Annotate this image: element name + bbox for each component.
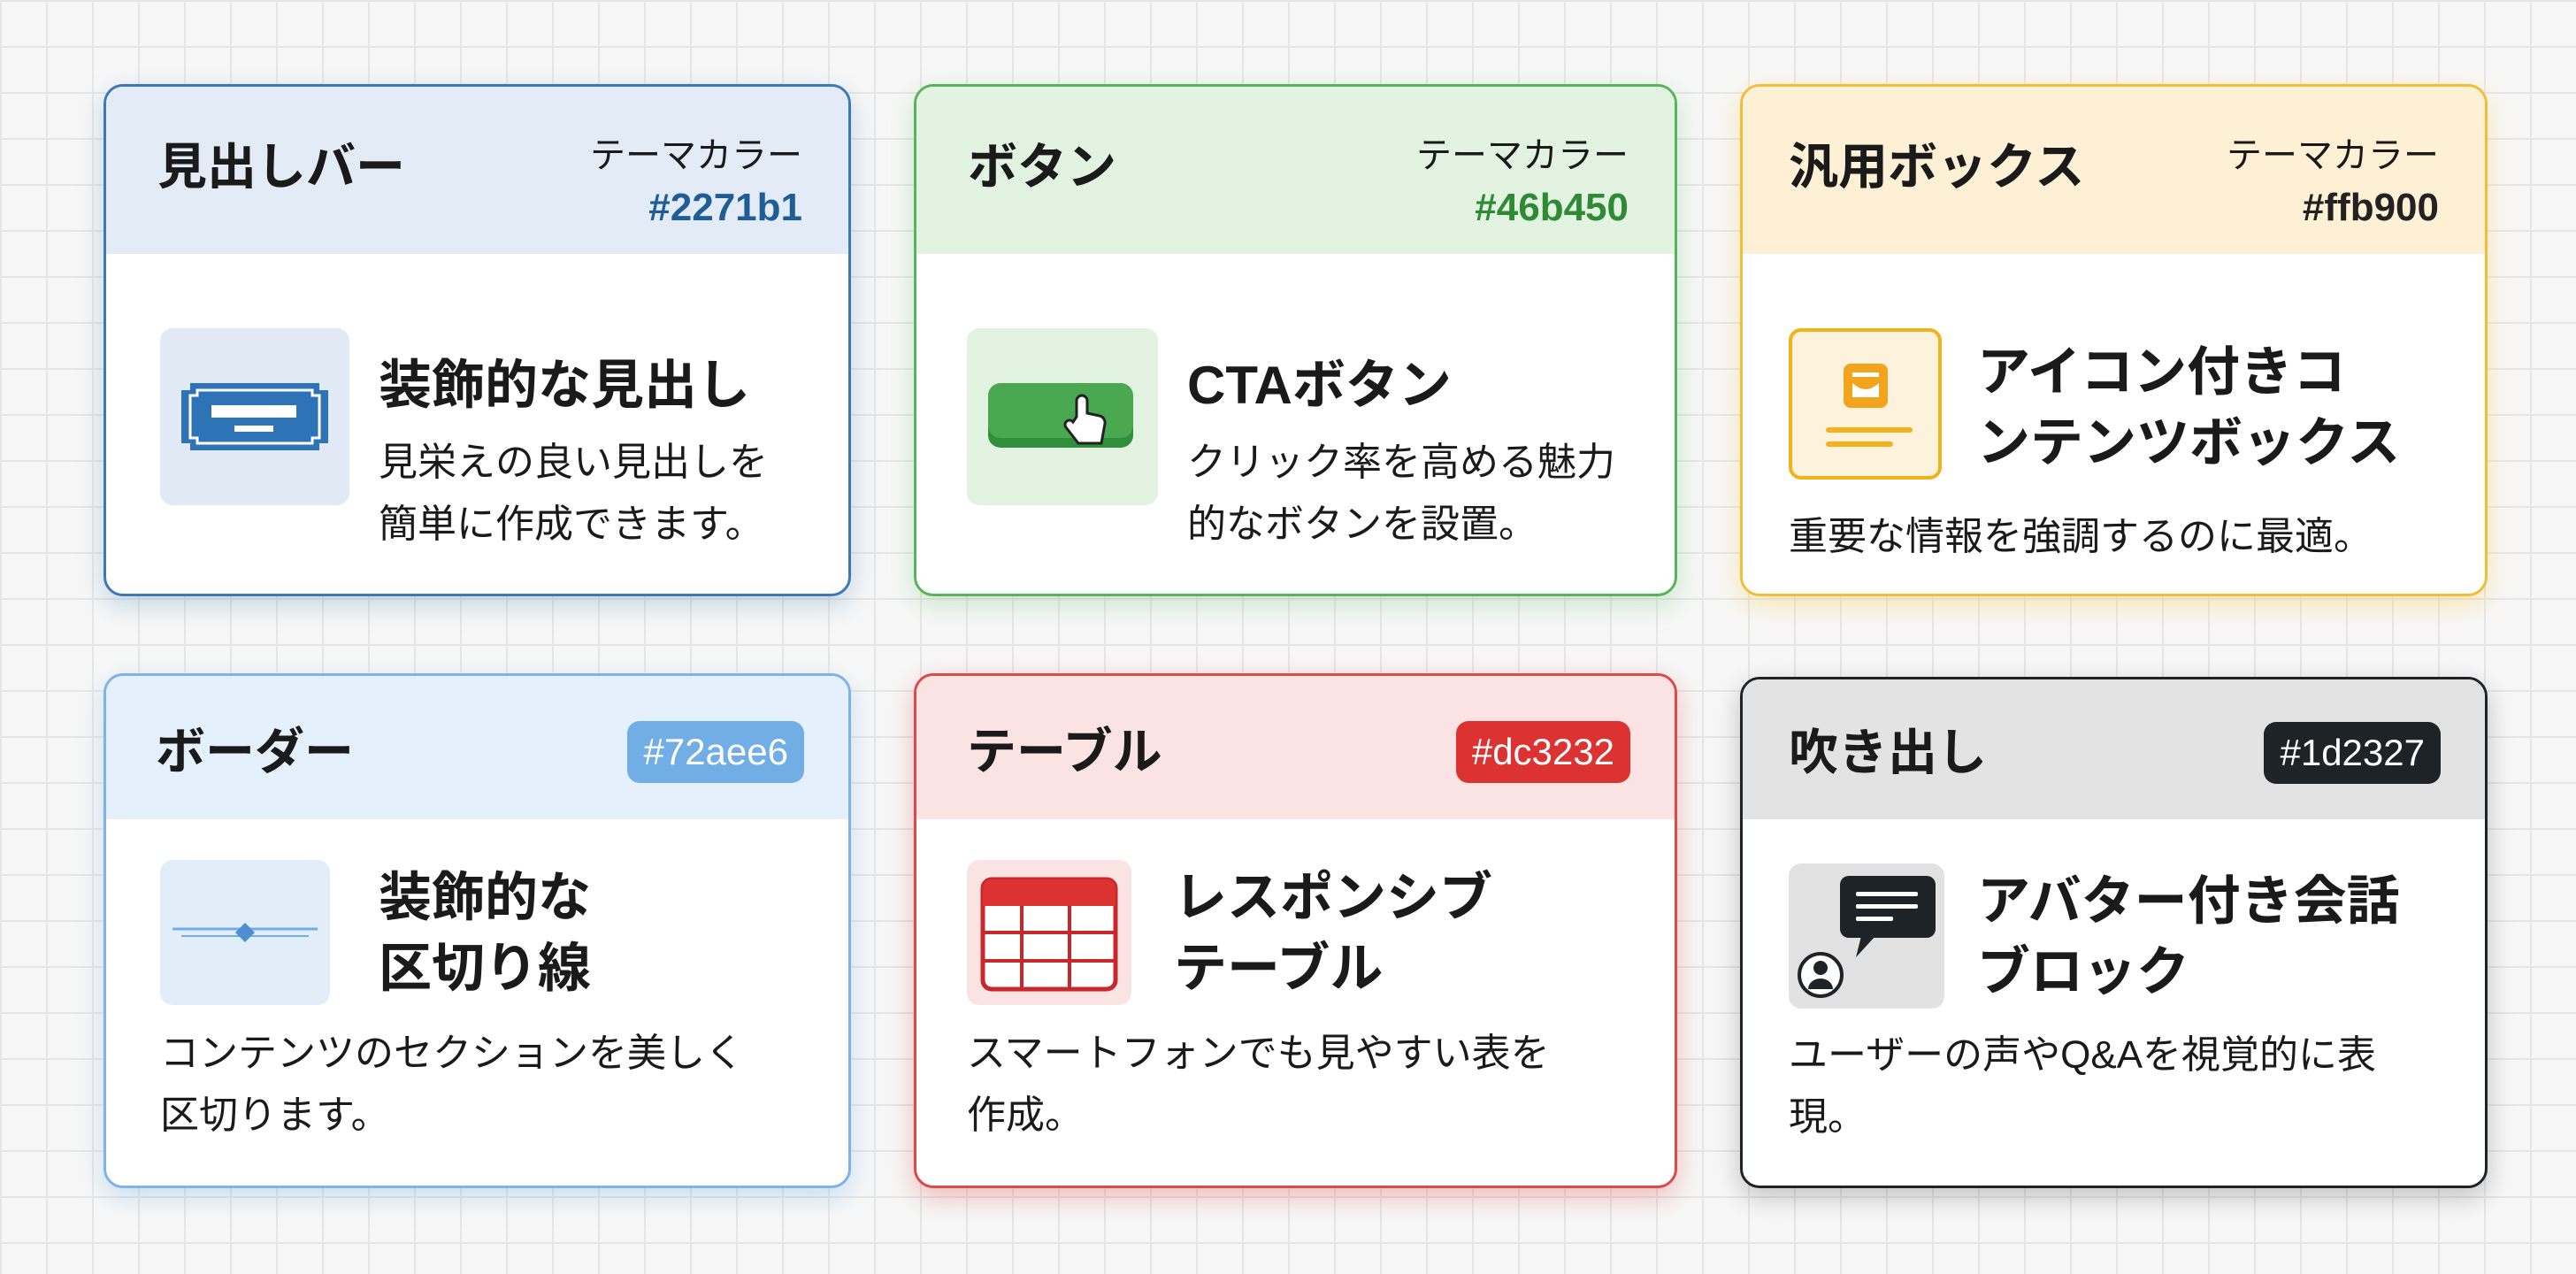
- icon: CTA button: [967, 328, 1158, 505]
- theme color label: テーマカラー: [2227, 136, 2439, 175]
- description: コンテンツのセクションを美しく: [160, 1032, 744, 1075]
- description: スマートフォンでも見やすい表を: [967, 1032, 1550, 1075]
- hex code: #46b450: [1475, 186, 1629, 229]
- title: レスポンシブテーブル: [1174, 868, 1492, 998]
- header: border: [106, 676, 848, 819]
- heading: 吹き出し: 吹き出し: [1789, 725, 1987, 780]
- panel: heading bar: [104, 84, 851, 596]
- header: table: [916, 676, 1675, 819]
- description: [967, 1032, 1550, 1137]
- description: [160, 1032, 744, 1137]
- hex code: #ffb900: [2303, 186, 2439, 229]
- theme color label: テーマカラー: [1416, 136, 1629, 175]
- description: ユーザーの声やQ&Aを視覚的に表: [1789, 1033, 2376, 1077]
- description: 重要な情報を強調するのに最適。: [1789, 515, 2373, 558]
- icon: avatar chat: [1789, 863, 1944, 1009]
- heading: 汎用ボックス: 汎用ボックス: [1789, 139, 2084, 195]
- heading: 見出しバー: 見出しバー: [157, 139, 405, 195]
- title: アバター付き会話ブロック: ブロック: [1977, 942, 2189, 1002]
- title: アイコン付きコンテンツボックス: ンテンツボックス: [1977, 413, 2400, 472]
- theme color label: テーマカラー: [590, 136, 802, 175]
- panel: speech bubble: [1740, 677, 2488, 1188]
- header: speech bubble: [1743, 679, 2485, 819]
- panel: table: [914, 673, 1677, 1188]
- title: レスポンシブテーブル: テーブル: [1174, 939, 1383, 998]
- badge: hex: #1d2327: [2280, 732, 2425, 773]
- description: 見栄えの良い見出しを: [379, 441, 768, 484]
- title: アバター付き会話ブロック: [1977, 871, 2400, 1002]
- badge: hex: #72aee6: [643, 731, 788, 772]
- title: 装飾的な区切り線: [379, 868, 591, 998]
- description: [1789, 1033, 2376, 1139]
- description: 現。: [1789, 1095, 1867, 1139]
- badge: hex: [627, 721, 804, 783]
- badge: hex: [1456, 721, 1630, 783]
- title: レスポンシブテーブル: レスポンシブ: [1174, 868, 1492, 927]
- panel: border: [104, 673, 851, 1188]
- description: クリック率を高める魅力: [1187, 441, 1615, 484]
- header: general box: [1743, 87, 2485, 254]
- title: 装飾的な区切り線: 装飾的な: [379, 868, 591, 927]
- panel: button: [914, 84, 1677, 596]
- hex code: #2271b1: [648, 186, 802, 229]
- title: アバター付き会話ブロック: アバター付き会話: [1977, 871, 2400, 931]
- title: アイコン付きコンテンツボックス: [1977, 342, 2400, 472]
- panel: general box: [1740, 84, 2488, 596]
- icon: content box: [1789, 328, 1942, 480]
- description: 簡単に作成できます。: [379, 503, 764, 546]
- title: 装飾的な区切り線: 区切り線: [379, 939, 591, 998]
- title: CTAボタン: CTAボタン: [1187, 356, 1452, 415]
- icon: decorative heading: [160, 328, 349, 505]
- description: 作成。: [967, 1094, 1084, 1137]
- heading: ボタン: ボタン: [968, 139, 1116, 195]
- description: [1187, 441, 1615, 546]
- header: button: [916, 87, 1675, 254]
- description: 的なボタンを設置。: [1187, 503, 1537, 546]
- description: [379, 441, 768, 546]
- title: アイコン付きコンテンツボックス: アイコン付きコ: [1977, 342, 2346, 402]
- description: 区切ります。: [160, 1094, 390, 1137]
- icon: divider: [160, 860, 330, 1005]
- badge: hex: #dc3232: [1472, 731, 1614, 772]
- title: 装飾的な見出し: 装飾的な見出し: [379, 356, 750, 415]
- heading: テーブル: テーブル: [967, 724, 1162, 779]
- heading: ボーダー: ボーダー: [156, 724, 354, 779]
- icon: table: [967, 860, 1131, 1005]
- badge: hex: [2264, 722, 2441, 784]
- header: heading bar: [106, 87, 848, 254]
